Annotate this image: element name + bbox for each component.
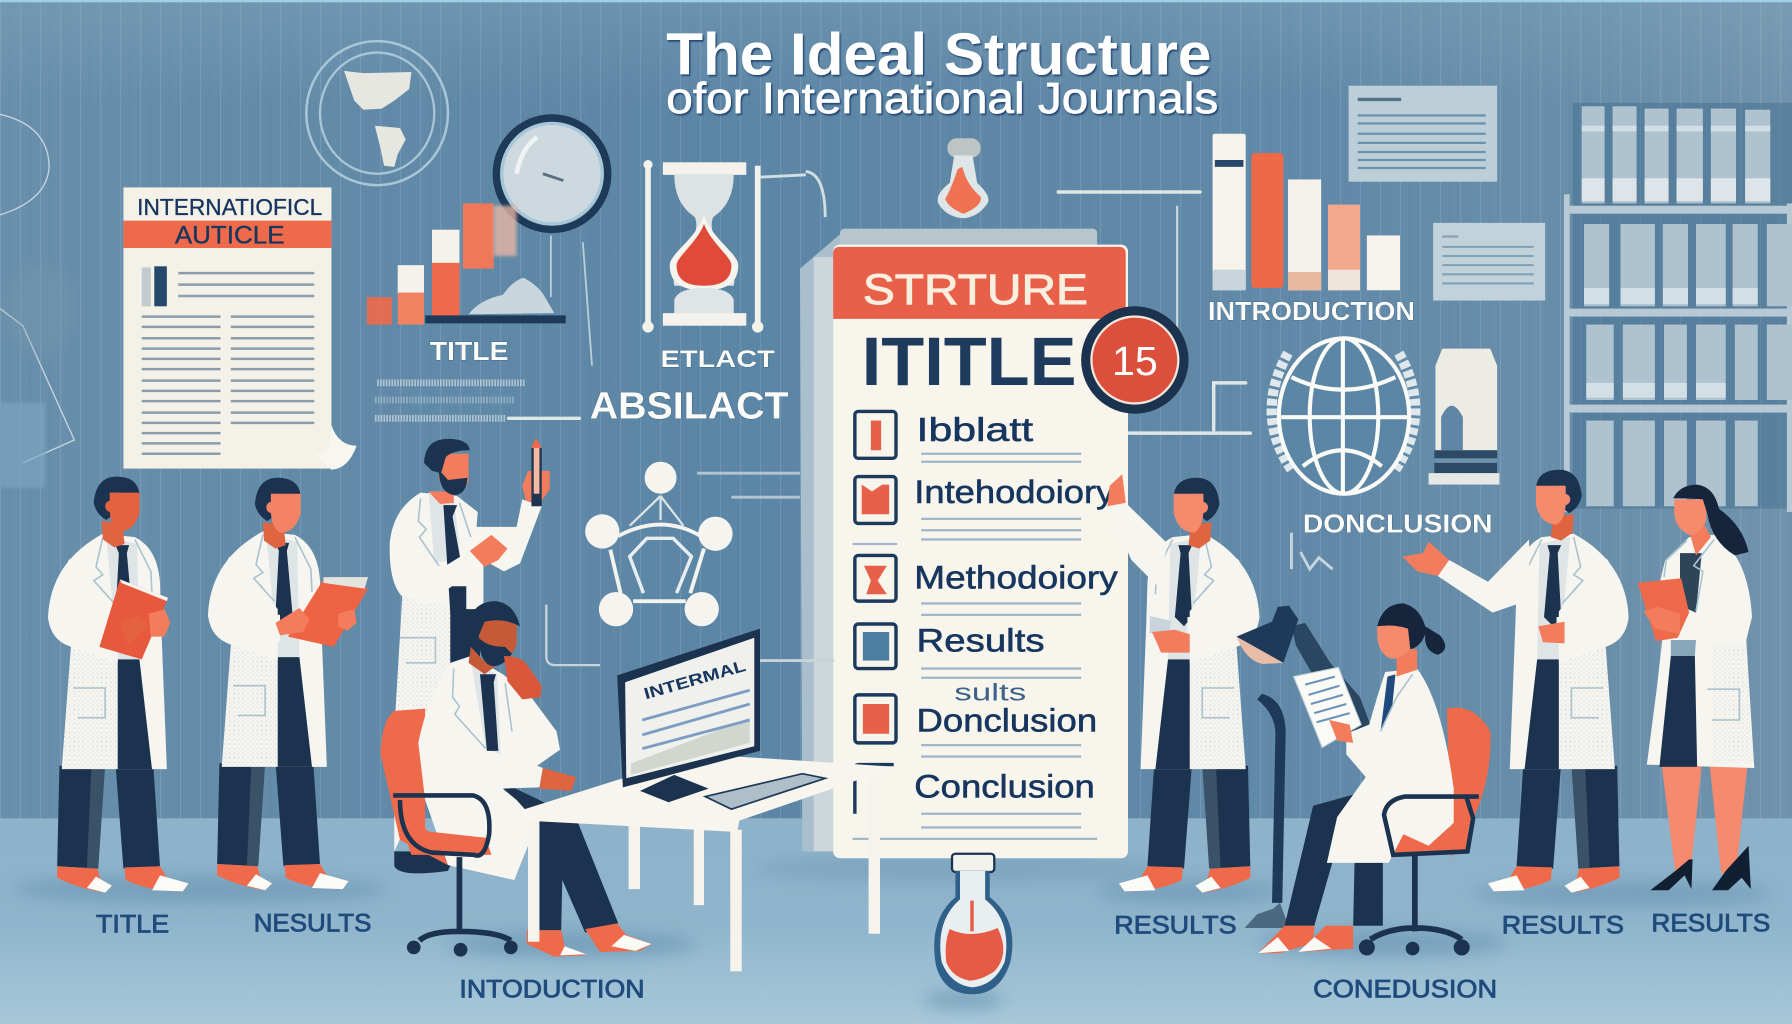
checklist row 2: Intehodoiory <box>914 474 1114 510</box>
checklist row 5 <box>855 680 1097 743</box>
label: INTODUCTION: INTODUCTION <box>459 976 645 1004</box>
connector: hourglass tap <box>760 171 825 217</box>
person: seated at desk <box>381 601 651 957</box>
icon: world globe circle <box>306 41 448 185</box>
badge: 15: 15 <box>1112 338 1158 384</box>
checklist separators <box>853 454 1097 839</box>
checklist row 5: Donclusion <box>917 702 1097 738</box>
checklist row 4 <box>855 622 1045 669</box>
person: woman with folder <box>1638 485 1754 890</box>
sheet title: ITITLE <box>862 323 1077 400</box>
panel: international article paper <box>123 187 357 470</box>
connector: globe to sheet <box>1129 383 1250 433</box>
checklist row 6: Conclusion <box>914 769 1095 805</box>
person: standing with pen <box>390 438 550 873</box>
person: far left with folder <box>48 477 189 893</box>
icon: magnifier lens <box>493 114 611 366</box>
label: ETLACT: ETLACT <box>661 346 775 373</box>
floor <box>0 818 1792 1024</box>
checklist row 2 <box>855 474 1114 523</box>
document: top right <box>1349 86 1497 182</box>
faded background silhouettes <box>0 114 74 488</box>
person: seated woman reading <box>1258 603 1491 955</box>
checklist row 1 <box>855 411 1033 458</box>
checklist row 4: Results <box>917 622 1045 658</box>
label: DONCLUSION: DONCLUSION <box>1303 509 1493 539</box>
document: second <box>1433 223 1545 301</box>
icon: molecule pentagon <box>585 462 733 626</box>
icon: top flask <box>938 138 989 218</box>
label: RESULTS two: RESULTS <box>1502 912 1624 940</box>
label: TITLE bottom: TITLE <box>96 911 169 939</box>
bar chart: left <box>367 203 566 325</box>
icon: bottle <box>1429 349 1499 485</box>
label: RESULTS three: RESULTS <box>1651 909 1770 937</box>
checklist row 3 <box>855 555 1118 601</box>
person: gesturing left <box>1402 470 1629 893</box>
title: The Ideal Structure <box>666 20 1211 87</box>
label: ABSILACT: ABSILACT <box>590 384 789 426</box>
small caption text lines <box>375 383 526 418</box>
label: INTRODUCTION: INTRODUCTION <box>1208 296 1415 326</box>
floor shadows <box>11 855 1771 1009</box>
monitor: INTERMAL <box>642 658 748 703</box>
connector lines: sheet left <box>546 473 834 665</box>
paper subheading: AUTICLE <box>175 221 285 249</box>
checklist row 5: sults <box>954 680 1026 707</box>
paper heading: INTERNATIOFICL <box>137 194 322 220</box>
label: CONEDUSION: CONEDUSION <box>1313 976 1497 1004</box>
keyboard <box>705 774 825 809</box>
checklist row 1: Ibblatt <box>917 412 1033 449</box>
label: TITLE: TITLE <box>430 336 509 366</box>
icon: laurel globe <box>1272 338 1415 494</box>
icon: hourglass <box>642 160 763 333</box>
checklist row 3: Methodoiory <box>914 560 1118 596</box>
person: pointing at sheet <box>1107 474 1259 893</box>
sheet header: STRTURE <box>863 266 1088 313</box>
small scribble mark <box>1291 533 1333 569</box>
chair arm and base <box>402 829 491 855</box>
badge: 15 <box>1081 306 1189 414</box>
desk <box>521 757 896 971</box>
desk lamp <box>1237 606 1377 928</box>
bar chart: books <box>1213 134 1400 290</box>
label: RESULTS one: RESULTS <box>1114 912 1237 940</box>
icon: bottom flask <box>934 854 1012 994</box>
chair frame <box>1384 797 1479 855</box>
connector: flask to books <box>1058 192 1200 331</box>
bookshelf <box>1566 103 1792 512</box>
checklist row 6 <box>855 765 1095 814</box>
title: ofor International Journals <box>666 75 1218 123</box>
label: NESULTS: NESULTS <box>254 909 371 937</box>
person: second left with folder <box>208 478 368 890</box>
title <box>666 20 1218 123</box>
panel: structure sheet <box>800 229 1128 858</box>
monitor <box>617 629 760 802</box>
connector: caption to abstract <box>509 417 579 420</box>
